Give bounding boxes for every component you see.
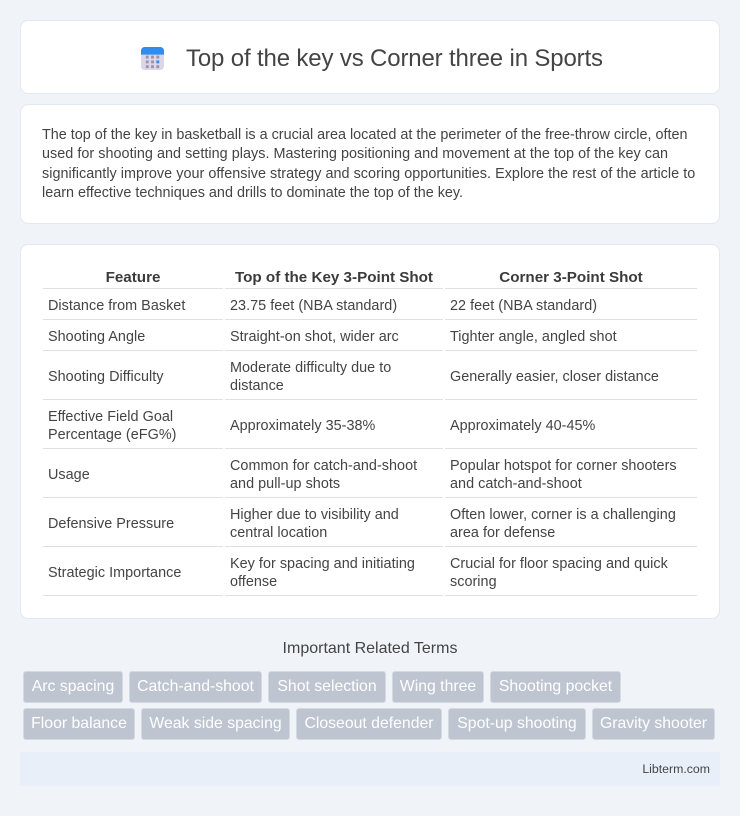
comparison table: offense <box>230 574 277 590</box>
row: usage: Usage <box>48 467 90 483</box>
comparison table: Crucial for floor spacing and quick <box>450 556 668 572</box>
intro text: used for shooting and setting plays. Mastering positioning and movement at the top of the key can <box>42 146 668 162</box>
tag <box>23 671 123 703</box>
tag: Gravity shooter <box>600 715 707 732</box>
tag <box>448 708 586 740</box>
comparison table: scoring <box>450 574 497 590</box>
comparison table: 23.75 feet (NBA standard) <box>230 298 397 314</box>
footer <box>20 752 720 786</box>
tag: Floor balance <box>31 715 127 732</box>
comparison table: distance <box>230 378 284 394</box>
header: Feature: Feature <box>106 269 160 286</box>
header: Top of the Key: Top of the Key 3-Point Shot <box>235 269 433 286</box>
comparison table: Tighter angle, angled shot <box>450 329 617 345</box>
comparison table: and catch-and-shoot <box>450 476 582 492</box>
comparison table: Often lower, corner is a challenging <box>450 507 676 523</box>
tag <box>129 671 262 703</box>
title: Top of the key vs Corner three in Sports <box>186 45 603 72</box>
related tags <box>23 671 715 740</box>
comparison table: Generally easier, closer distance <box>450 369 659 385</box>
icon: calendar <box>140 47 164 70</box>
comparison table: central location <box>230 525 327 541</box>
comparison table: Common for catch-and-shoot <box>230 458 417 474</box>
tag: Shooting pocket <box>499 678 612 695</box>
comparison table: Approximately 40-45% <box>450 418 595 434</box>
row: eFG: Percentage (eFG%) <box>48 427 176 443</box>
tag: Arc spacing <box>32 678 114 695</box>
tag <box>296 708 442 740</box>
comparison table: Key for spacing and initiating <box>230 556 415 572</box>
related terms heading: Important Related Terms <box>283 640 457 657</box>
row: distance: Distance from Basket <box>48 298 185 314</box>
comparison table: Higher due to visibility and <box>230 507 399 523</box>
tag <box>592 708 715 740</box>
tag <box>141 708 290 740</box>
tag <box>490 671 621 703</box>
comparison table <box>43 269 697 596</box>
comparison table: Straight-on shot, wider arc <box>230 329 399 345</box>
intro text: significantly improve your offensive strategy and scoring opportunities. Explore the rest of the article to <box>42 166 695 182</box>
comparison table: Popular hotspot for corner shooters <box>450 458 677 474</box>
tag: Wing three <box>400 678 476 695</box>
header panel <box>20 20 720 94</box>
tag: Closeout defender <box>304 715 434 732</box>
row: eFG: Effective Field Goal <box>48 409 173 425</box>
tag <box>268 671 386 703</box>
row: angle: Shooting Angle <box>48 329 145 345</box>
comparison table: 22 feet (NBA standard) <box>450 298 597 314</box>
row: difficulty: Shooting Difficulty <box>48 369 164 385</box>
comparison table: area for defense <box>450 525 555 541</box>
table panel <box>20 244 720 619</box>
comparison table: Approximately 35-38% <box>230 418 375 434</box>
comparison table: and pull-up shots <box>230 476 340 492</box>
header: Corner: Corner 3-Point Shot <box>499 269 643 286</box>
intro panel <box>20 104 720 224</box>
tag <box>23 708 135 740</box>
tag <box>392 671 484 703</box>
tag: Shot selection <box>277 678 377 695</box>
intro text: The top of the key in basketball is a crucial area located at the perimeter of the free-throw circle, often <box>42 127 688 143</box>
row: defense: Defensive Pressure <box>48 516 174 532</box>
intro text: learn effective techniques and drills to dominate the top of the key. <box>42 185 463 201</box>
intro text <box>42 127 695 201</box>
tag: Weak side spacing <box>149 715 282 732</box>
row: strategy: Strategic Importance <box>48 565 181 581</box>
row: eFG <box>48 409 176 443</box>
comparison table: Moderate difficulty due to <box>230 360 391 376</box>
tag: Catch-and-shoot <box>137 678 254 695</box>
footer credit: Libterm.com <box>642 762 710 776</box>
tag: Spot-up shooting <box>457 715 577 732</box>
